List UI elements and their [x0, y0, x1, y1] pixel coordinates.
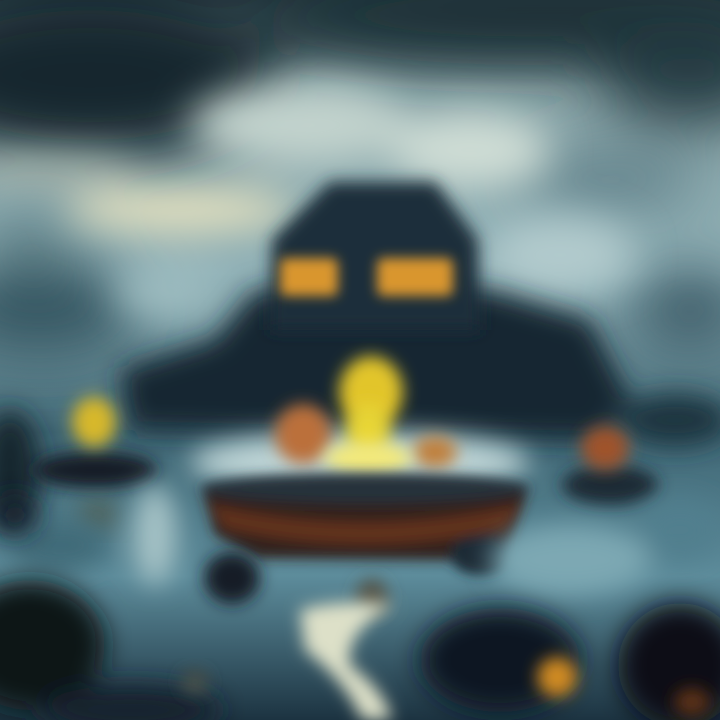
dark foreground rocks	[0, 495, 720, 720]
bright cloud band	[0, 85, 635, 320]
boat: hull	[200, 473, 530, 575]
boat: reflections below hull	[204, 552, 388, 615]
water: pale winding stream	[300, 602, 395, 720]
flame: yellow light with orange blobs	[275, 356, 457, 474]
window: left	[280, 258, 338, 296]
small right boat with orange globe	[562, 426, 658, 505]
small left boat with yellow globe	[33, 397, 157, 529]
window: right	[377, 258, 453, 296]
mansion: lower wings	[0, 290, 720, 530]
foreground orange lights	[181, 657, 710, 716]
house: upper block with roof	[270, 182, 480, 330]
storm clouds	[0, 0, 720, 355]
water: pale pool around boat	[190, 432, 530, 492]
water: lower glow and river	[10, 485, 720, 595]
